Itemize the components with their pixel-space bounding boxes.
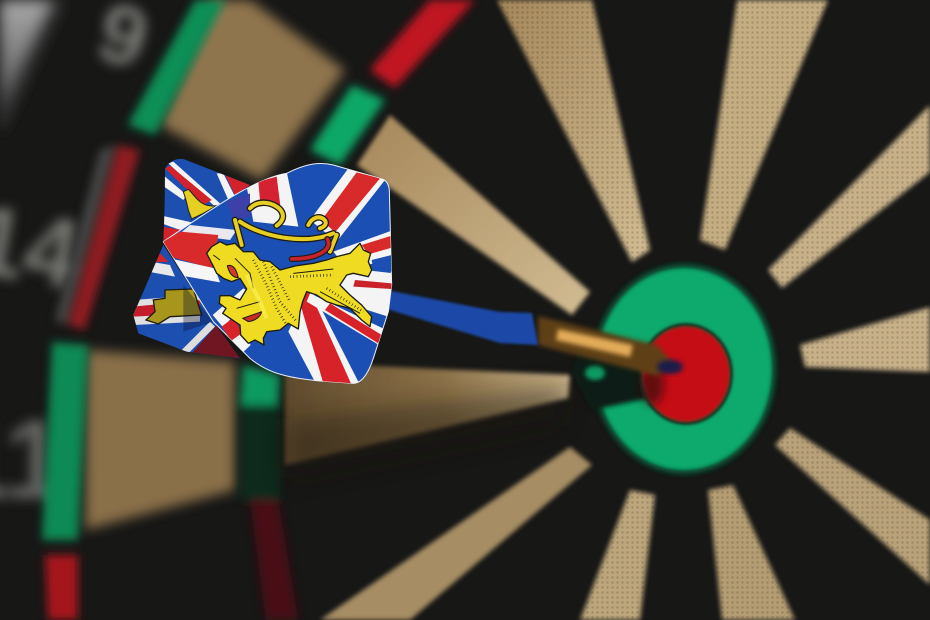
bull: small green spot — [585, 366, 605, 380]
wedge: right — [800, 307, 930, 372]
dart: lion crown scrolls — [235, 203, 337, 259]
board numbers — [0, 0, 158, 522]
wedge: bottom left — [320, 447, 592, 620]
ring: top left green — [128, 0, 225, 135]
bullseye — [572, 265, 775, 473]
dart: main flight — [163, 163, 393, 385]
outer board edge highlight — [0, 0, 64, 135]
outer wedges — [85, 0, 345, 530]
ring: left red — [68, 145, 140, 330]
wedge: upper right — [768, 105, 930, 288]
wedge: bottom right — [708, 485, 795, 620]
dart: barrel highlight — [556, 329, 633, 357]
bull: dark shade beside the tip — [640, 365, 664, 405]
wedge: upper left — [357, 115, 590, 315]
ring: inner dark red — [250, 500, 298, 620]
wedge: left, behind dart — [285, 362, 570, 465]
wedge: lower left block — [85, 350, 235, 530]
dart: rear flight — [133, 158, 250, 358]
wedge mesh texture — [497, 0, 930, 620]
wedge: upper left block — [160, 0, 345, 180]
bull: green ring — [593, 265, 775, 473]
scoring wedges — [285, 0, 930, 620]
dart: tip — [657, 360, 683, 374]
dart shadow — [285, 385, 570, 480]
bull: dark gap left of the ring — [572, 330, 650, 410]
bull: red centre — [641, 325, 731, 423]
dart: lion emblem — [207, 242, 372, 345]
dart — [120, 145, 683, 385]
dart: rear flight lion details — [183, 189, 217, 219]
wedge: lower right — [775, 428, 930, 585]
wedge: top — [497, 0, 650, 262]
wedge: top centre — [700, 0, 828, 250]
dart: barrel — [538, 316, 672, 376]
ring: top red — [370, 0, 475, 88]
double and treble ring segments — [42, 0, 475, 620]
ring: upper inner green — [310, 85, 385, 165]
ring: inner green under flight — [240, 365, 280, 408]
ring: bottom red — [45, 555, 78, 620]
ring: left green — [42, 342, 88, 540]
dart: blue shaft — [350, 283, 538, 345]
bull: outer edge shade — [593, 265, 775, 473]
wedge: bottom — [580, 490, 655, 620]
